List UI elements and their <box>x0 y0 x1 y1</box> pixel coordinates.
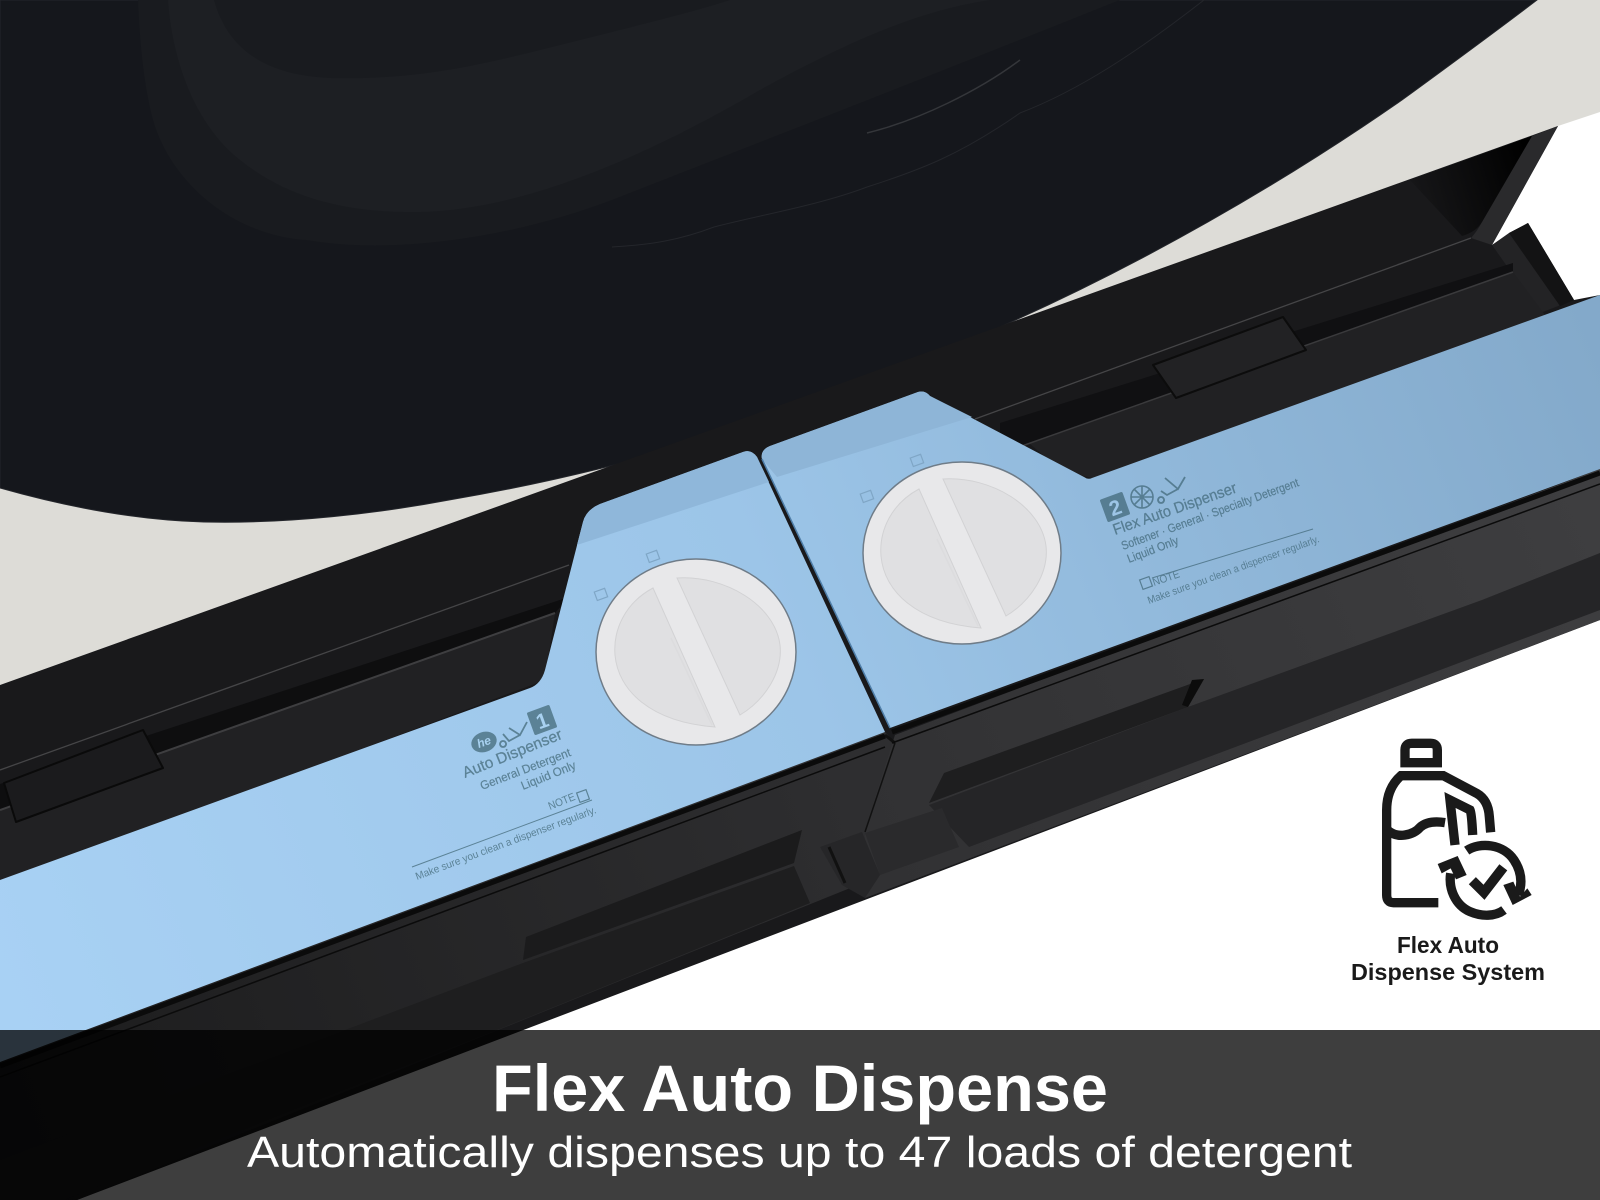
right recess <box>943 479 1046 616</box>
lower tray panel right <box>1029 272 1545 480</box>
left recess <box>615 588 715 727</box>
cycle arcs <box>1467 845 1521 895</box>
lock icons <box>594 454 924 601</box>
dark lower strip <box>929 553 1600 847</box>
badge 1: 1 <box>533 708 552 734</box>
right recess <box>677 578 780 715</box>
subtitle: Automatically dispenses up to 47 loads of detergent <box>247 1128 1352 1177</box>
right drawer handle slot <box>929 679 1204 803</box>
icon caption: Dispense System <box>1351 959 1545 985</box>
icon caption: Flex Auto <box>1397 932 1499 958</box>
check mark <box>1472 867 1503 892</box>
icon: liquid detergent <box>500 722 527 747</box>
badge 2: 2 <box>1106 496 1125 521</box>
note rule <box>412 800 592 867</box>
title: Flex Auto Dispense <box>492 1051 1108 1125</box>
left recess <box>881 489 981 628</box>
label: flex auto dispenser <box>1100 475 1321 607</box>
dial bar inner line <box>937 539 978 626</box>
hinge block right <box>1153 317 1306 398</box>
auto dispenser name: Auto Dispenser <box>460 726 565 782</box>
he badge: he <box>475 733 493 751</box>
right arrow head <box>1503 882 1532 905</box>
note icon <box>1140 577 1152 589</box>
note: NOTE <box>547 791 577 813</box>
note text: Make sure you clean a dispenser regularly. <box>1146 533 1321 607</box>
left drawer front <box>0 732 895 1200</box>
bottle body <box>1387 776 1491 903</box>
liquid only: Liquid Only <box>519 758 578 793</box>
drawer joint <box>865 808 959 875</box>
lower tray panel left <box>0 613 555 885</box>
badge 1 <box>527 705 558 736</box>
label: auto dispenser <box>412 705 598 883</box>
note rule <box>1152 529 1313 578</box>
note text: Make sure you clean a dispenser regularly. <box>414 804 598 883</box>
pour spout <box>1450 800 1473 845</box>
dial right <box>863 462 1061 644</box>
left drawer handle slot <box>523 830 802 960</box>
icon: liquid detergent <box>1158 477 1185 503</box>
badge 2 <box>1100 492 1131 523</box>
flap inner shadow <box>1410 136 1532 236</box>
blue panel left <box>0 451 885 1077</box>
liquid wave <box>1387 822 1445 835</box>
washer door <box>0 0 1537 522</box>
right drawer front <box>820 469 1600 898</box>
lower strip <box>0 866 810 1200</box>
blue panel right <box>762 295 1600 743</box>
icon caption <box>1351 932 1545 985</box>
bottom banner <box>0 1030 1600 1200</box>
note: NOTE <box>1151 568 1181 589</box>
liquid only: Liquid Only <box>1125 533 1180 566</box>
washer beige body <box>0 0 1600 685</box>
general detergent: General Detergent <box>478 745 573 793</box>
shadow line under left blue panel <box>0 736 885 1066</box>
softener general specialty: Softener · General · Specialty Detergent <box>1119 475 1301 553</box>
hinge block left <box>4 730 163 822</box>
icon: softener flower <box>1131 486 1153 508</box>
note icon <box>577 790 589 802</box>
icon: detergent bottle with cycle check <box>1387 743 1532 915</box>
rod right <box>1000 263 1513 454</box>
he badge <box>468 728 500 756</box>
rod left <box>0 597 569 810</box>
tray end wall <box>1492 223 1574 313</box>
flap side wall <box>1471 126 1558 245</box>
flap shade left <box>577 451 769 545</box>
left arrow head <box>1438 856 1467 879</box>
shadow line under right blue panel <box>892 473 1600 732</box>
flap shade right <box>762 392 972 477</box>
flex auto dispenser name: Flex Auto Dispenser <box>1111 480 1239 539</box>
dial left <box>596 559 796 745</box>
bottle cap <box>1405 743 1437 763</box>
dial bar inner line <box>671 638 712 725</box>
